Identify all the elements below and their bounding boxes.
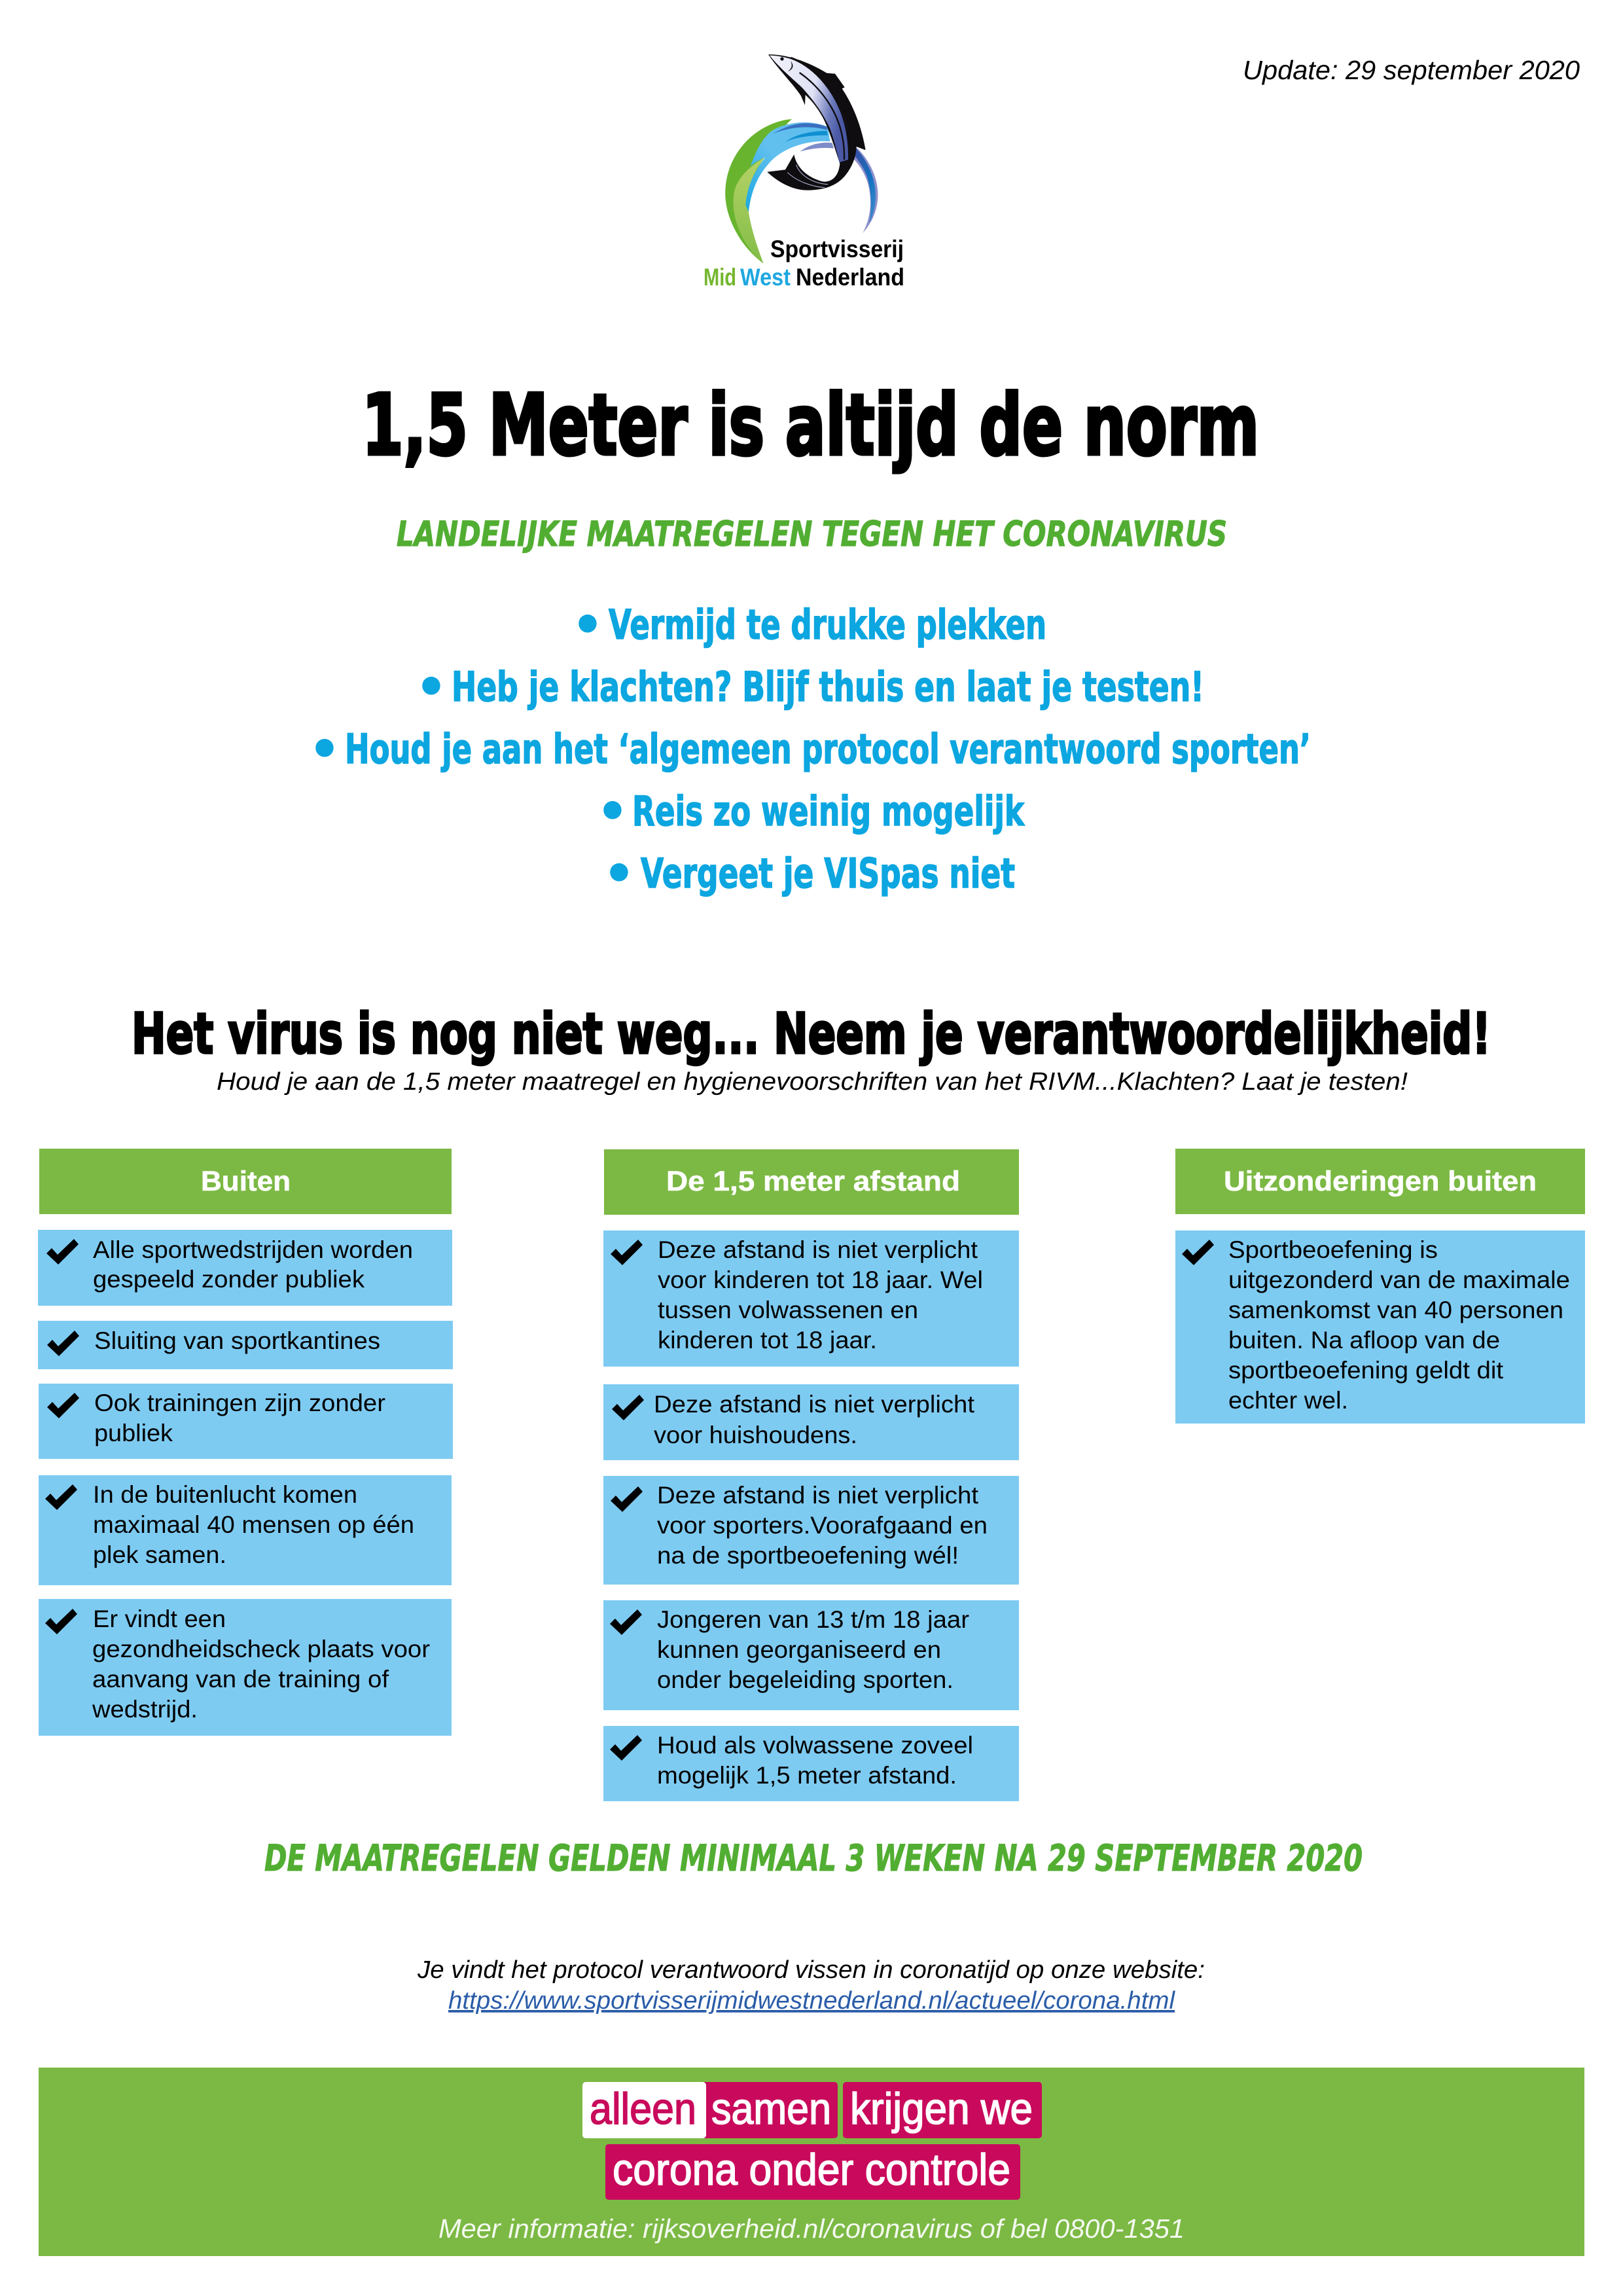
panel: De 1,5 meter afstand [603, 1149, 1019, 1801]
logo text [704, 236, 904, 291]
protocol note: Je vindt het protocol verantwoord vissen in coronatijd op onze website: [417, 1956, 1205, 1984]
item: kinderen: Deze afstand is niet verplicht [658, 1236, 978, 1263]
bullet list: blue measures: Vermijd te drukke plekken [609, 601, 1046, 649]
panel: Uitzonderingen buiten [1175, 1149, 1585, 1424]
heading: Uitzonderingen buiten: Uitzonderingen buiten [1224, 1166, 1537, 1197]
italic subline: Houd je aan de 1,5 meter maatregel en hygienevoorschriften van het RIVM...Klachten? Laat je testen! [217, 1068, 1408, 1096]
logo text: Sportvisserij [770, 236, 904, 262]
logo: Sportvisserij MidWest Nederland [704, 54, 904, 291]
item: trainingen: Ook trainingen zijn zonder [94, 1390, 385, 1416]
item: gezondheidscheck: wedstrijd. [92, 1696, 198, 1723]
item: kinderen: tussen volwassenen en [658, 1297, 918, 1323]
heading: De 1,5 meter afstand [604, 1149, 1019, 1215]
item: gezondheidscheck: Er vindt een [93, 1605, 226, 1632]
slogan: alleen samen krijgen we: alleen [590, 2084, 696, 2134]
item: sportbeoefening: uitgezonderd van de maximale [1228, 1266, 1570, 1293]
item: jongeren: onder begeleiding sporten. [657, 1666, 954, 1693]
website link: https://www.sportvisserijmidwestnederland.nl/actueel/corona.html [448, 1987, 1176, 2015]
bullet list: blue measures: • [571, 596, 604, 655]
heading: Uitzonderingen buiten [1175, 1149, 1585, 1214]
item: gezondheidscheck: gezondheidscheck plaats voor [92, 1636, 430, 1662]
footer banner [39, 2068, 1584, 2256]
item: sportbeoefening [1175, 1230, 1585, 1424]
item: sportkantines [38, 1321, 453, 1369]
bullet list: blue measures: Vergeet je VISpas niet [641, 850, 1015, 897]
item: huishoudens [603, 1384, 1019, 1460]
item: gezondheidscheck: aanvang van de training of [92, 1666, 389, 1693]
bullet list: blue measures: Heb je klachten? Blijf thuis en laat je testen! [452, 663, 1204, 711]
bullet list: blue measures: • [603, 845, 635, 904]
item: sportwedstrijden: gespeeld zonder publiek [93, 1266, 365, 1293]
item: jongeren: kunnen georganiseerd en [657, 1636, 941, 1663]
item: huishoudens: Deze afstand is niet verplicht [654, 1391, 975, 1418]
item: sportbeoefening: samenkomst van 40 personen [1228, 1297, 1563, 1323]
item: volwassene [603, 1726, 1019, 1801]
slogan: alleen samen krijgen we [582, 2082, 1042, 2138]
item: buitenlucht [39, 1475, 452, 1585]
item: sportbeoefening: buiten. Na afloop van de [1228, 1327, 1500, 1354]
item: buitenlucht: In de buitenlucht komen [93, 1481, 357, 1508]
item: sportbeoefening: sportbeoefening geldt dit [1228, 1357, 1504, 1384]
logo text: West [740, 264, 791, 291]
green subheading: LANDELIJKE MAATREGELEN TEGEN HET CORONAVIRUS [397, 514, 1227, 554]
slogan: alleen samen krijgen we: krijgen we [850, 2084, 1033, 2134]
item: volwassene: Houd als volwassene zoveel [657, 1732, 973, 1759]
item: kinderen: kinderen tot 18 jaar. [658, 1327, 877, 1354]
update date: Update: 29 september 2020 [1243, 55, 1580, 85]
item: gezondheidscheck [39, 1599, 452, 1736]
item: kinderen: voor kinderen tot 18 jaar. Wel [658, 1266, 983, 1293]
item: sportbeoefening: Sportbeoefening is [1228, 1236, 1438, 1263]
bullet list: blue measures: • [415, 658, 448, 717]
heading: De 1,5 meter afstand: De 1,5 meter afstand [666, 1166, 960, 1197]
item: sportwedstrijden [38, 1230, 452, 1306]
item: sportwedstrijden: Alle sportwedstrijden worden [93, 1236, 413, 1263]
slogan: corona onder controle: corona onder controle [613, 2145, 1010, 2195]
title: 1,5 Meter is altijd de norm [362, 377, 1259, 475]
item: buitenlucht: maximaal 40 mensen op één [93, 1511, 414, 1538]
item: sporters: voor sporters.Voorafgaand en [657, 1512, 988, 1539]
bullet list: blue measures: • [308, 721, 341, 780]
item: trainingen: publiek [94, 1420, 173, 1446]
item: jongeren [603, 1600, 1019, 1710]
icon: blue waves [745, 122, 878, 233]
item: sporters: na de sportbeoefening wél! [657, 1542, 959, 1569]
bullet list: blue measures [308, 596, 1311, 904]
item: kinderen [603, 1230, 1019, 1367]
icon: fish [767, 54, 866, 190]
item: trainingen [39, 1384, 453, 1459]
item: volwassene: mogelijk 1,5 meter afstand. [657, 1762, 957, 1789]
panel: Buiten [38, 1149, 453, 1736]
item: sportkantines: Sluiting van sportkantines [94, 1327, 380, 1354]
item: buitenlucht: plek samen. [93, 1541, 226, 1568]
bullet list: blue measures: Reis zo weinig mogelijk [632, 787, 1025, 835]
heading: Buiten: Buiten [201, 1166, 291, 1197]
item: sporters: Deze afstand is niet verplicht [657, 1482, 979, 1509]
item: sporters [603, 1476, 1019, 1585]
heading: Buiten [39, 1149, 452, 1214]
icon: green arc [725, 119, 792, 264]
item: sportbeoefening: echter wel. [1228, 1387, 1348, 1414]
item: jongeren: Jongeren van 13 t/m 18 jaar [657, 1606, 969, 1633]
logo text: Nederland [796, 264, 904, 291]
bullet list: blue measures: • [596, 783, 629, 842]
item: huishoudens: voor huishoudens. [654, 1422, 857, 1448]
slogan: alleen samen krijgen we: samen [711, 2084, 831, 2134]
more information: Meer informatie: rijksoverheid.nl/coronavirus of bel 0800-1351 [438, 2214, 1185, 2244]
logo text: Mid [704, 264, 736, 291]
